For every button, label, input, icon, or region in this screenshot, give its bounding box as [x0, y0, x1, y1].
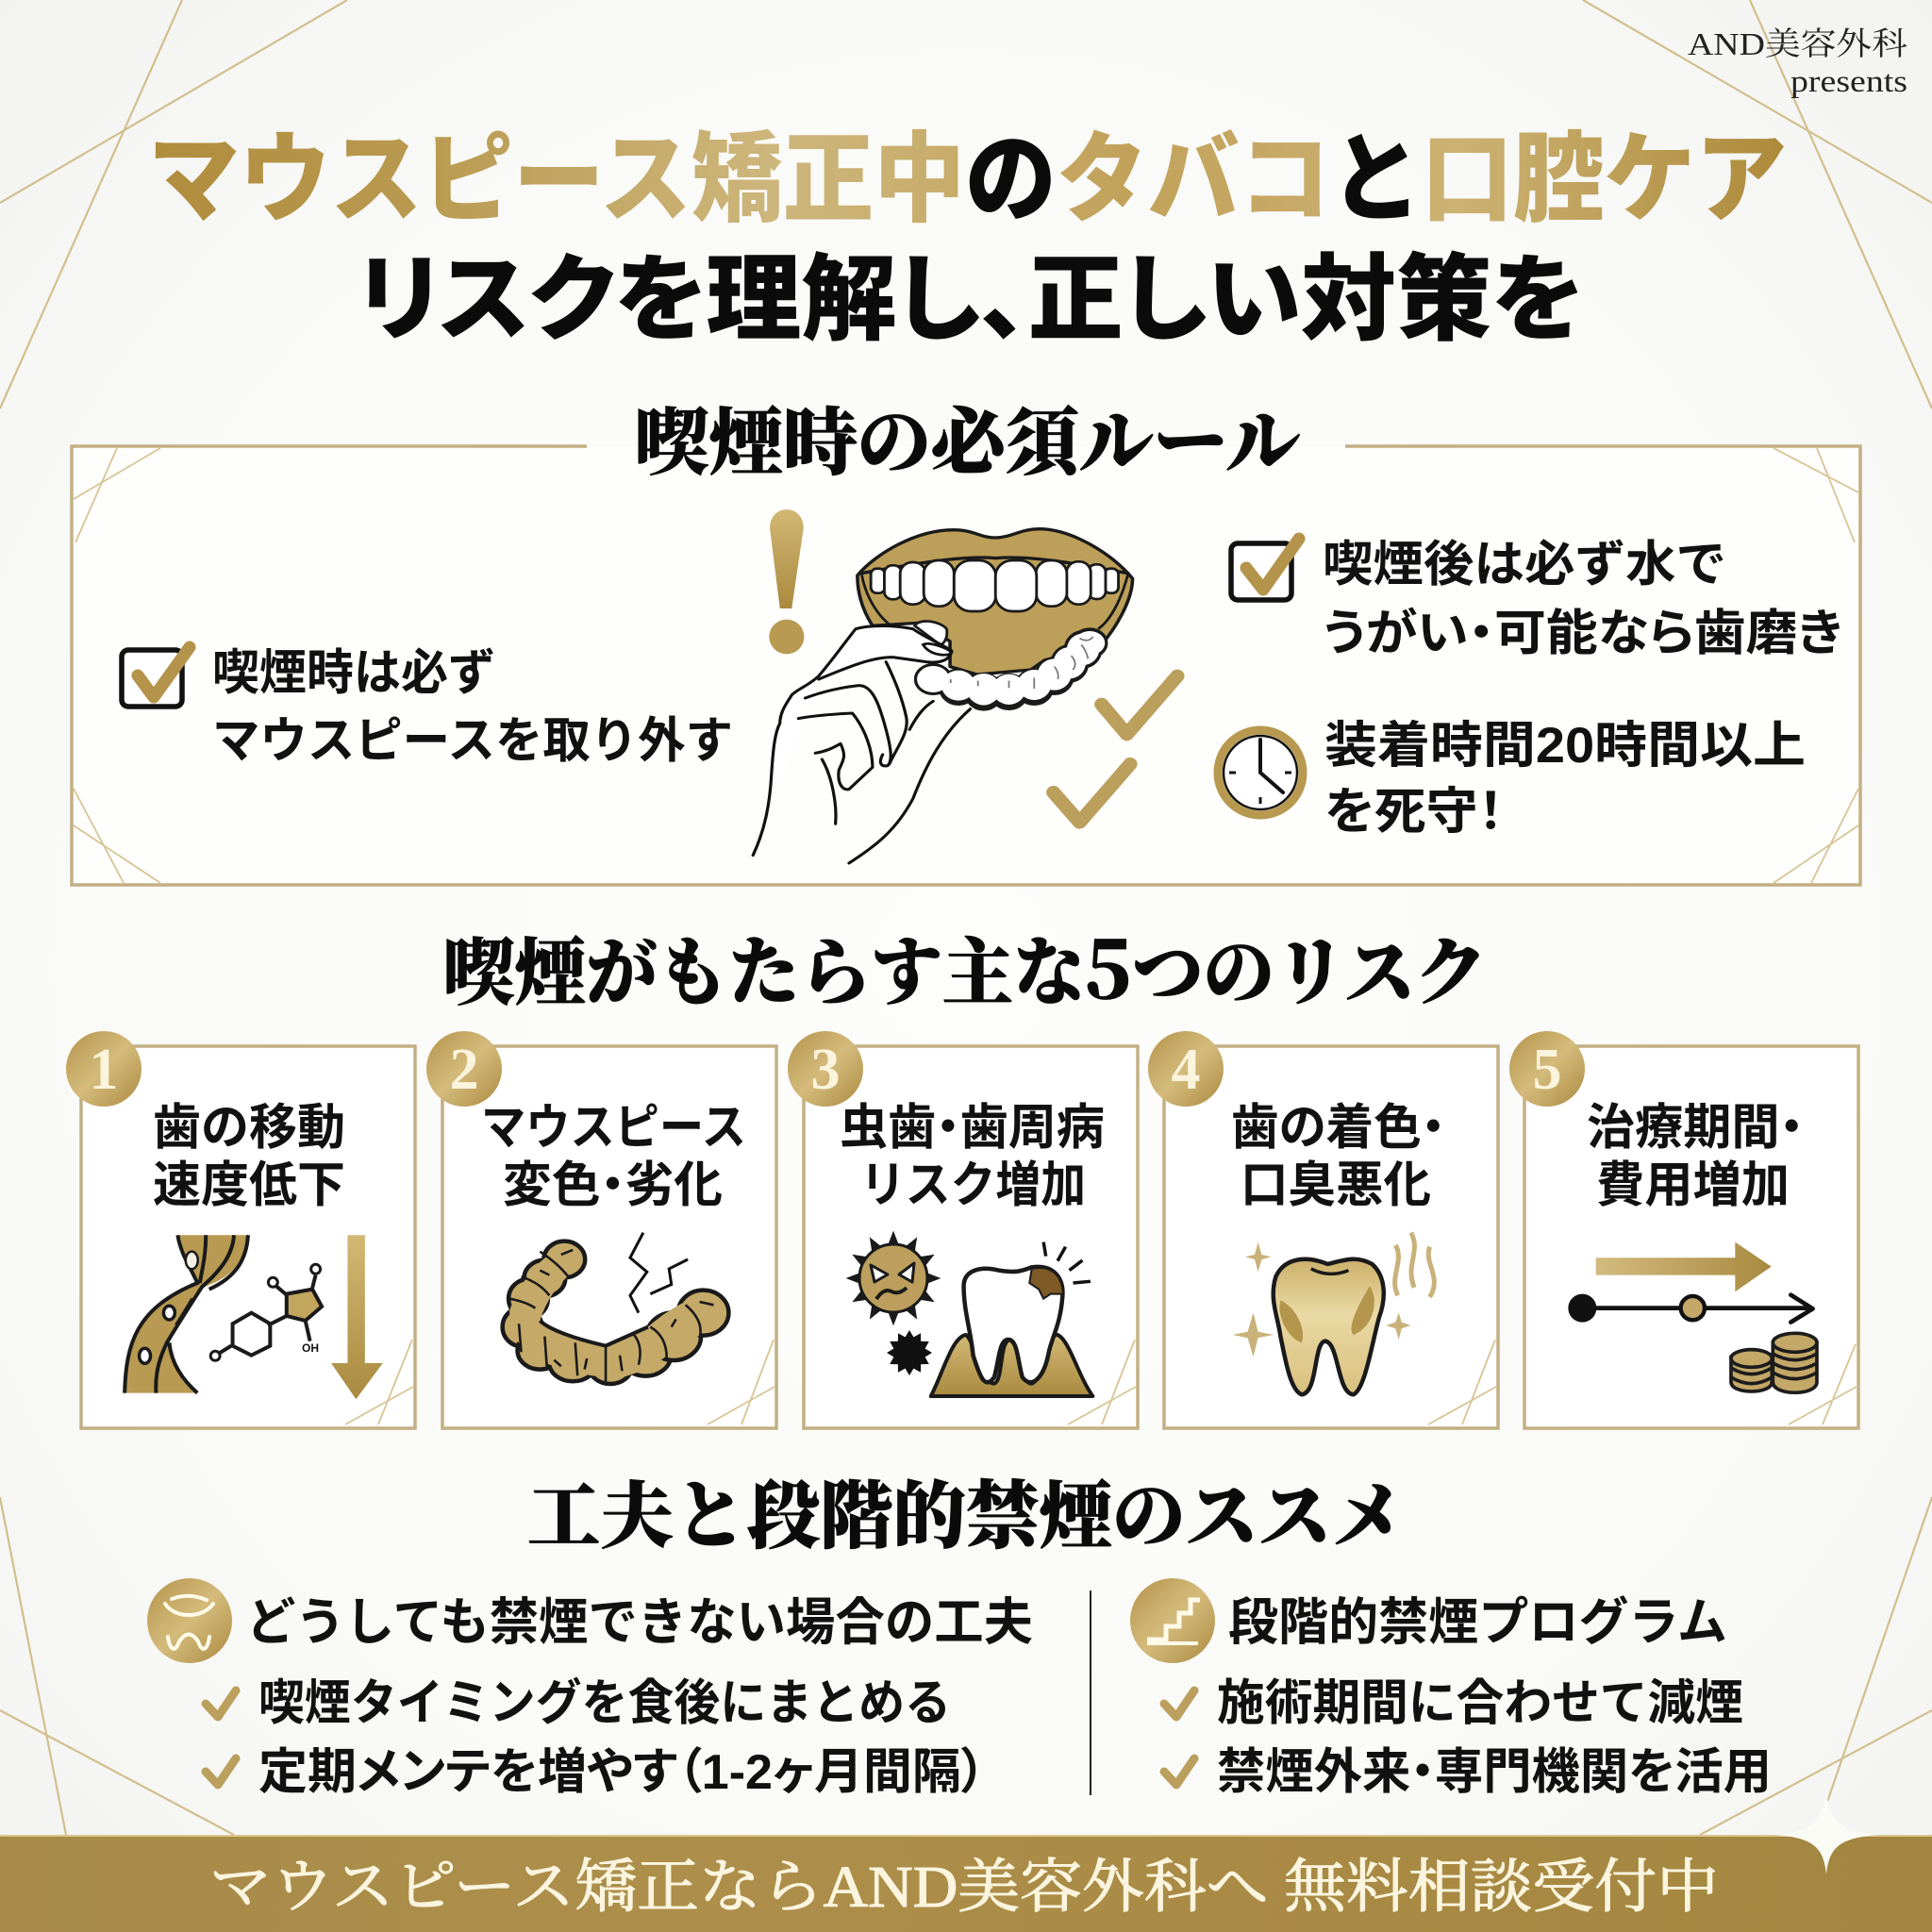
list: program: 禁煙外来・専門機関を活用	[1217, 1745, 1772, 1800]
icon: cracked discolored aligner	[503, 1233, 728, 1384]
rule: wear time with clock icon	[1218, 718, 1806, 840]
footer banner: マウスピース矯正ならAND美容外科へ 無料相談受付中	[209, 1856, 1719, 1920]
card 3: caries and gum disease: 3	[811, 1038, 840, 1102]
illustration: hand removing aligner	[753, 509, 1177, 863]
icon: small black bacterium	[887, 1330, 932, 1375]
card 2: aligner discoloration: 2	[449, 1038, 479, 1102]
sparkle	[1774, 1790, 1879, 1874]
rule: remove aligner: マウスピースを取り外す	[212, 714, 733, 769]
heading: smoking rules: 喫煙時の必須ルール	[635, 384, 1300, 490]
rule: remove aligner	[122, 646, 733, 769]
card 1: slower tooth movement: OH	[302, 1341, 319, 1355]
column: stepwise cessation program	[1130, 1578, 1772, 1800]
rule: wear time with clock icon: 装着時間20時間以上	[1324, 718, 1806, 774]
icon: stained tooth with sparkles and odor	[1233, 1233, 1434, 1394]
column: tips when you cannot quit	[147, 1578, 1033, 1800]
heading: five risks: 喫煙がもたらす主な5つのリスク	[443, 908, 1487, 1022]
list: tips: 定期メンテを増やす（1-2ヶ月間隔）	[258, 1745, 986, 1800]
list: tips	[206, 1676, 986, 1800]
card 1: slower tooth movement: 速度低下	[153, 1158, 345, 1213]
card 2: aligner discoloration: 変色・劣化	[503, 1158, 723, 1213]
title: マウスピース矯正中のタバコと口腔ケア	[148, 99, 1787, 242]
rule: rinse after smoking: うがい・可能なら歯磨き	[1323, 607, 1842, 661]
icon: bacteria	[847, 1232, 940, 1324]
card 1: slower tooth movement: 1	[89, 1038, 119, 1102]
card 4: stained teeth and bad breath: 4	[1172, 1038, 1200, 1102]
card 2: aligner discoloration: マウスピース	[481, 1101, 746, 1156]
card 2: aligner discoloration	[426, 1031, 776, 1428]
card 5: longer treatment and higher cost	[1509, 1031, 1858, 1428]
aligner: outline layer	[917, 630, 1105, 708]
rule: remove aligner: 喫煙時は必ず	[212, 646, 495, 701]
icon: stairs badge	[1130, 1578, 1215, 1663]
rule: rinse after smoking	[1231, 538, 1842, 661]
footer banner	[0, 1835, 1932, 1932]
list: tips: 喫煙タイミングを食後にまとめる	[258, 1676, 951, 1731]
title	[148, 99, 1787, 359]
panel: smoking rules	[72, 384, 1860, 885]
card 5: longer treatment and higher cost: 費用増加	[1596, 1158, 1790, 1213]
heading: tips and stepwise cessation: 工夫と段階的禁煙のススメ	[527, 1457, 1405, 1563]
card 1: slower tooth movement: 歯の移動	[153, 1101, 345, 1156]
icon: decayed tooth with receding gum	[931, 1242, 1092, 1396]
card 3: caries and gum disease: リスク増加	[860, 1158, 1086, 1213]
column: tips when you cannot quit: どうしても禁煙できない場合の工夫	[246, 1594, 1033, 1651]
icon: arrow, timeline and coins	[1568, 1242, 1817, 1392]
card 5: longer treatment and higher cost: 治療期間・	[1587, 1101, 1804, 1156]
card 4: stained teeth and bad breath	[1148, 1031, 1498, 1428]
rule: wear time with clock icon: を死守！	[1324, 784, 1504, 840]
clinic credit: presents	[1790, 65, 1907, 99]
column: stepwise cessation program: 段階的禁煙プログラム	[1228, 1594, 1727, 1651]
card 3: caries and gum disease: 虫歯・歯周病	[840, 1101, 1105, 1156]
card 3: caries and gum disease	[788, 1031, 1138, 1428]
rule: rinse after smoking: 喫煙後は必ず水で	[1323, 538, 1726, 592]
card 1: slower tooth movement	[66, 1031, 415, 1428]
icon: mouth badge	[147, 1578, 232, 1663]
card 4: stained teeth and bad breath: 歯の着色・	[1231, 1101, 1445, 1156]
clinic credit	[1688, 26, 1907, 99]
list: program: 施術期間に合わせて減煙	[1217, 1676, 1743, 1731]
clinic credit: AND美容外科	[1688, 26, 1907, 62]
card 4: stained teeth and bad breath: 口臭悪化	[1241, 1158, 1431, 1213]
icon: blood vessel and nicotine molecule with down arrow	[125, 1235, 383, 1399]
title: リスクを理解し、正しい対策を	[358, 223, 1583, 359]
card 5: longer treatment and higher cost: 5	[1532, 1038, 1562, 1102]
list: program	[1164, 1676, 1772, 1800]
